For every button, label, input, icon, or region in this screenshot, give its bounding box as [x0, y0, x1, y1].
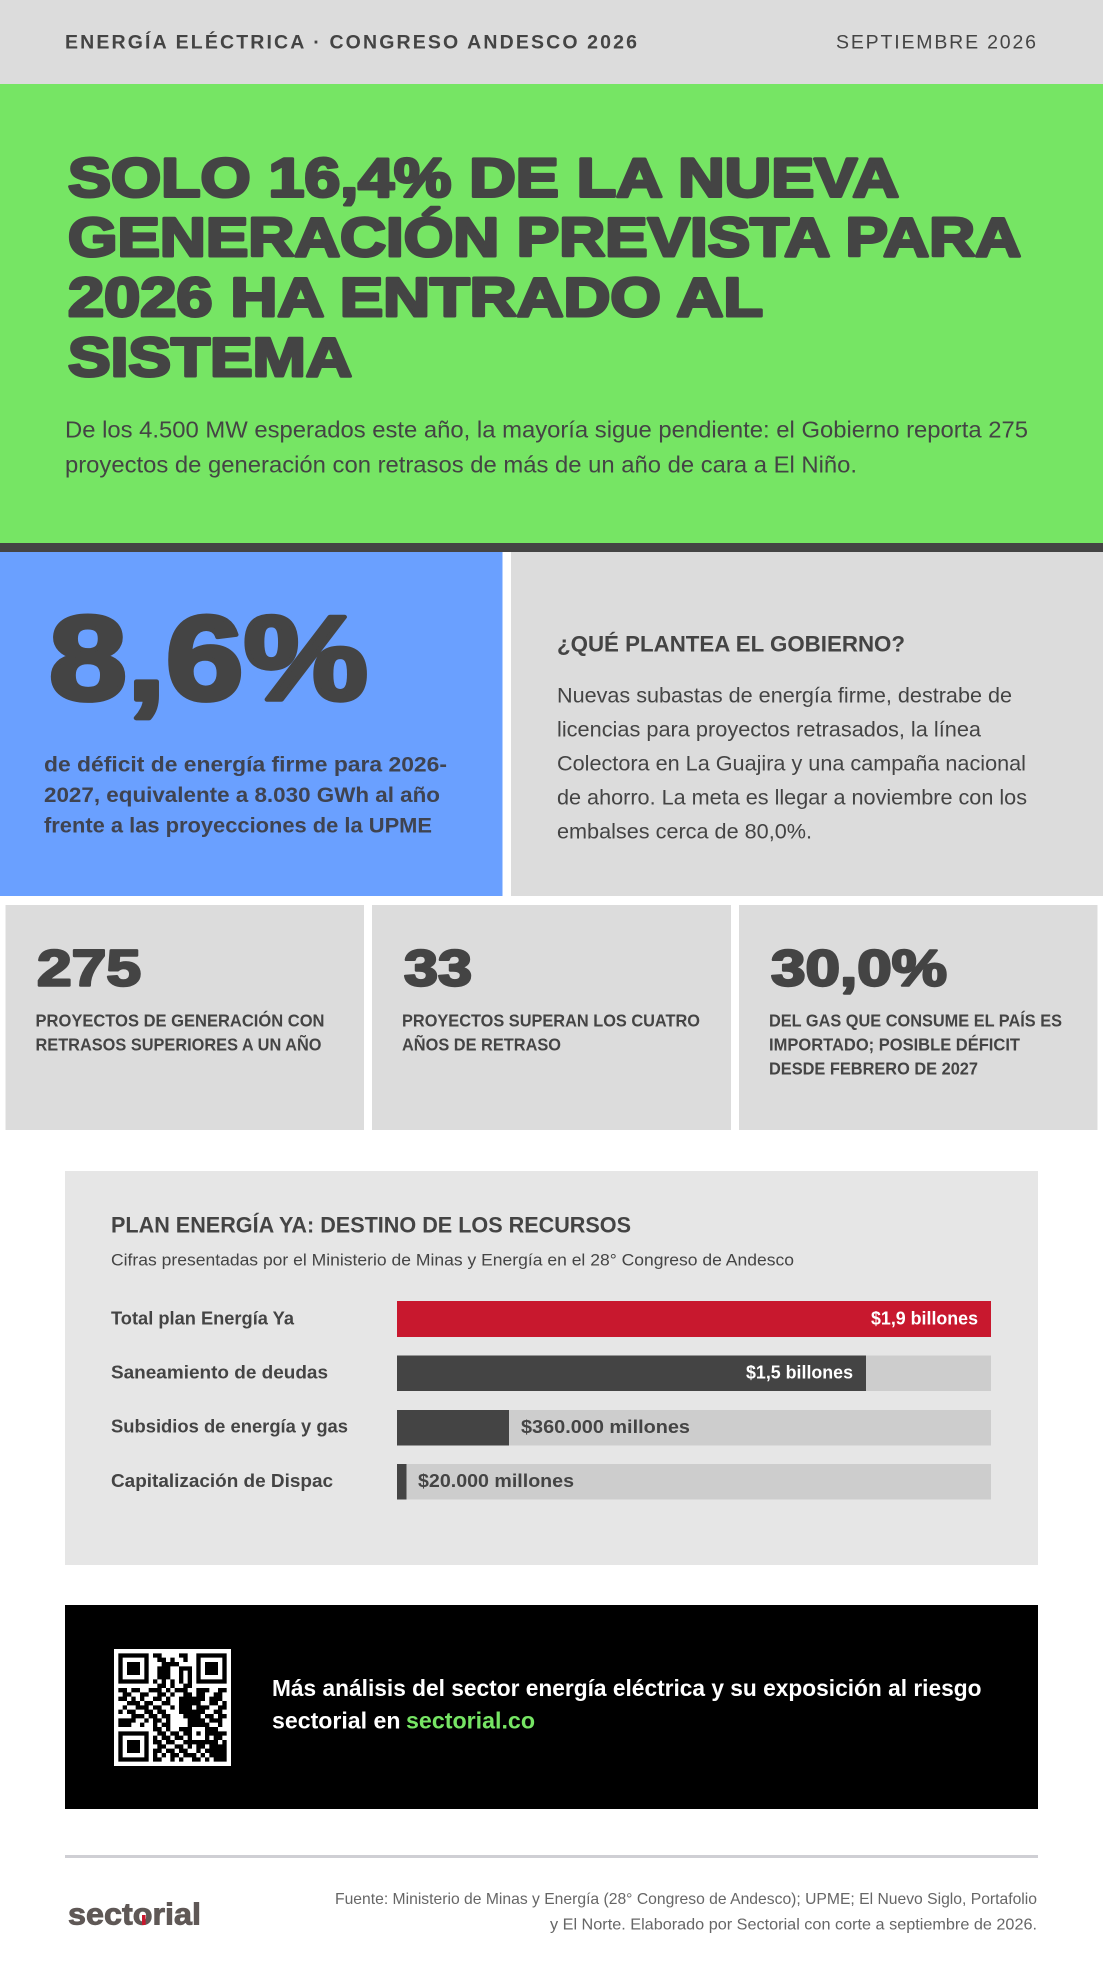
big number: 8,6%: [49, 592, 368, 726]
bar: Dispac: [111, 1464, 991, 1500]
footer rule: [65, 1855, 1038, 1858]
main headline: [68, 146, 1021, 388]
stat number: 33: [404, 940, 472, 996]
source note: y El Norte. Elaborado por Sectorial con corte a septiembre de 2026.: [550, 1916, 1037, 1934]
bar: subsidios: [111, 1410, 991, 1446]
bar: saneamiento: [111, 1356, 991, 1391]
stat description: [44, 752, 447, 838]
stat label: DESDE FEBRERO DE 2027: [769, 1058, 978, 1078]
panel body text: de ahorro. La meta es llegar a noviembre con los: [557, 786, 1027, 810]
bar: total plan: [111, 1301, 991, 1337]
panel body text: Nuevas subastas de energía firme, destrabe de: [557, 684, 1012, 708]
dark divider: [0, 543, 1103, 552]
bar: subsidios: $360.000 millones: [521, 1417, 690, 1437]
stat card: 33: [372, 905, 731, 1130]
panel body text: embalses cerca de 80,0%.: [557, 820, 812, 844]
panel: key stat deficit: [0, 552, 502, 896]
CTA text: Más análisis del sector energía eléctrica y su exposición al riesgo: [272, 1675, 982, 1701]
panel body text: Colectora en La Guajira y una campaña nacional: [557, 752, 1026, 776]
bar: saneamiento: Saneamiento de deudas: [111, 1362, 328, 1382]
bar: total plan: $1,9 billones: [871, 1308, 978, 1328]
hero panel: [0, 84, 1103, 544]
bar: saneamiento: $1,5 billones: [746, 1362, 853, 1382]
panel heading: ¿QUÉ PLANTEA EL GOBIERNO?: [557, 632, 905, 656]
stat description: 2027, equivalente a 8.030 GWh al año: [44, 783, 440, 807]
hero subtitle: proyectos de generación con retrasos de más de un año de cara a El Niño.: [65, 452, 857, 478]
header date: SEPTIEMBRE 2026: [836, 32, 1036, 54]
hero subtitle: De los 4.500 MW esperados este año, la mayoría sigue pendiente: el Gobierno reporta 275: [65, 416, 1028, 442]
CTA text: sectorial.co: [406, 1708, 535, 1734]
panel body text: [557, 684, 1027, 844]
panel body text: licencias para proyectos retrasados, la línea: [557, 718, 981, 742]
stat label: [402, 1010, 700, 1054]
stat number: 30,0%: [771, 940, 947, 996]
stat number: 275: [37, 940, 141, 996]
stat description: frente a las proyecciones de la UPME: [44, 814, 432, 838]
main headline: SISTEMA: [68, 326, 352, 388]
panel: government plan: [511, 552, 1103, 896]
bar: subsidios: Subsidios de energía y gas: [111, 1416, 348, 1436]
header title: ENERGÍA ELÉCTRICA · CONGRESO ANDESCO 2026: [65, 30, 637, 54]
main headline: 2026 HA ENTRADO AL: [68, 266, 763, 328]
source note: [335, 1891, 1037, 1934]
icon: sectorial logo: sectorial: [68, 1896, 201, 1932]
CTA text: sectorial en: [272, 1708, 400, 1734]
stat label: RETRASOS SUPERIORES A UN AÑO: [36, 1034, 322, 1054]
CTA text: [272, 1675, 982, 1734]
bar: total plan: Total plan Energía Ya: [111, 1308, 295, 1328]
stat label: DEL GAS QUE CONSUME EL PAÍS ES: [769, 1010, 1062, 1030]
stat label: [769, 1010, 1062, 1078]
stat label: PROYECTOS DE GENERACIÓN CON: [36, 1010, 324, 1030]
stat label: PROYECTOS SUPERAN LOS CUATRO: [402, 1010, 700, 1030]
bar: Dispac: Capitalización de Dispac: [111, 1471, 333, 1491]
source note: Fuente: Ministerio de Minas y Energía (28° Congreso de Andesco); UPME; El Nuevo Siglo, Portafolio: [335, 1891, 1037, 1908]
chart title: PLAN ENERGÍA YA: DESTINO DE LOS RECURSOS: [111, 1212, 631, 1238]
stat label: [36, 1010, 324, 1054]
QR code: [114, 1649, 231, 1766]
panel: call to action: [65, 1605, 1038, 1809]
header band: [0, 0, 1103, 84]
main headline: SOLO 16,4% DE LA NUEVA: [68, 146, 899, 208]
stat card: 275: [6, 905, 364, 1130]
hero subtitle: [65, 416, 1028, 478]
main headline: GENERACIÓN PREVISTA PARA: [68, 206, 1021, 268]
stat description: de déficit de energía firme para 2026-: [44, 752, 447, 776]
panel: bar chart Plan Energía Ya: [65, 1171, 1038, 1565]
stat label: AÑOS DE RETRASO: [402, 1034, 561, 1054]
chart subtitle: Cifras presentadas por el Ministerio de Minas y Energía en el 28° Congreso de Andesco: [111, 1252, 794, 1270]
stat card: 30,0%: [739, 905, 1098, 1130]
stat label: IMPORTADO; POSIBLE DÉFICIT: [769, 1034, 1020, 1054]
bar: Dispac: $20.000 millones: [418, 1471, 574, 1491]
